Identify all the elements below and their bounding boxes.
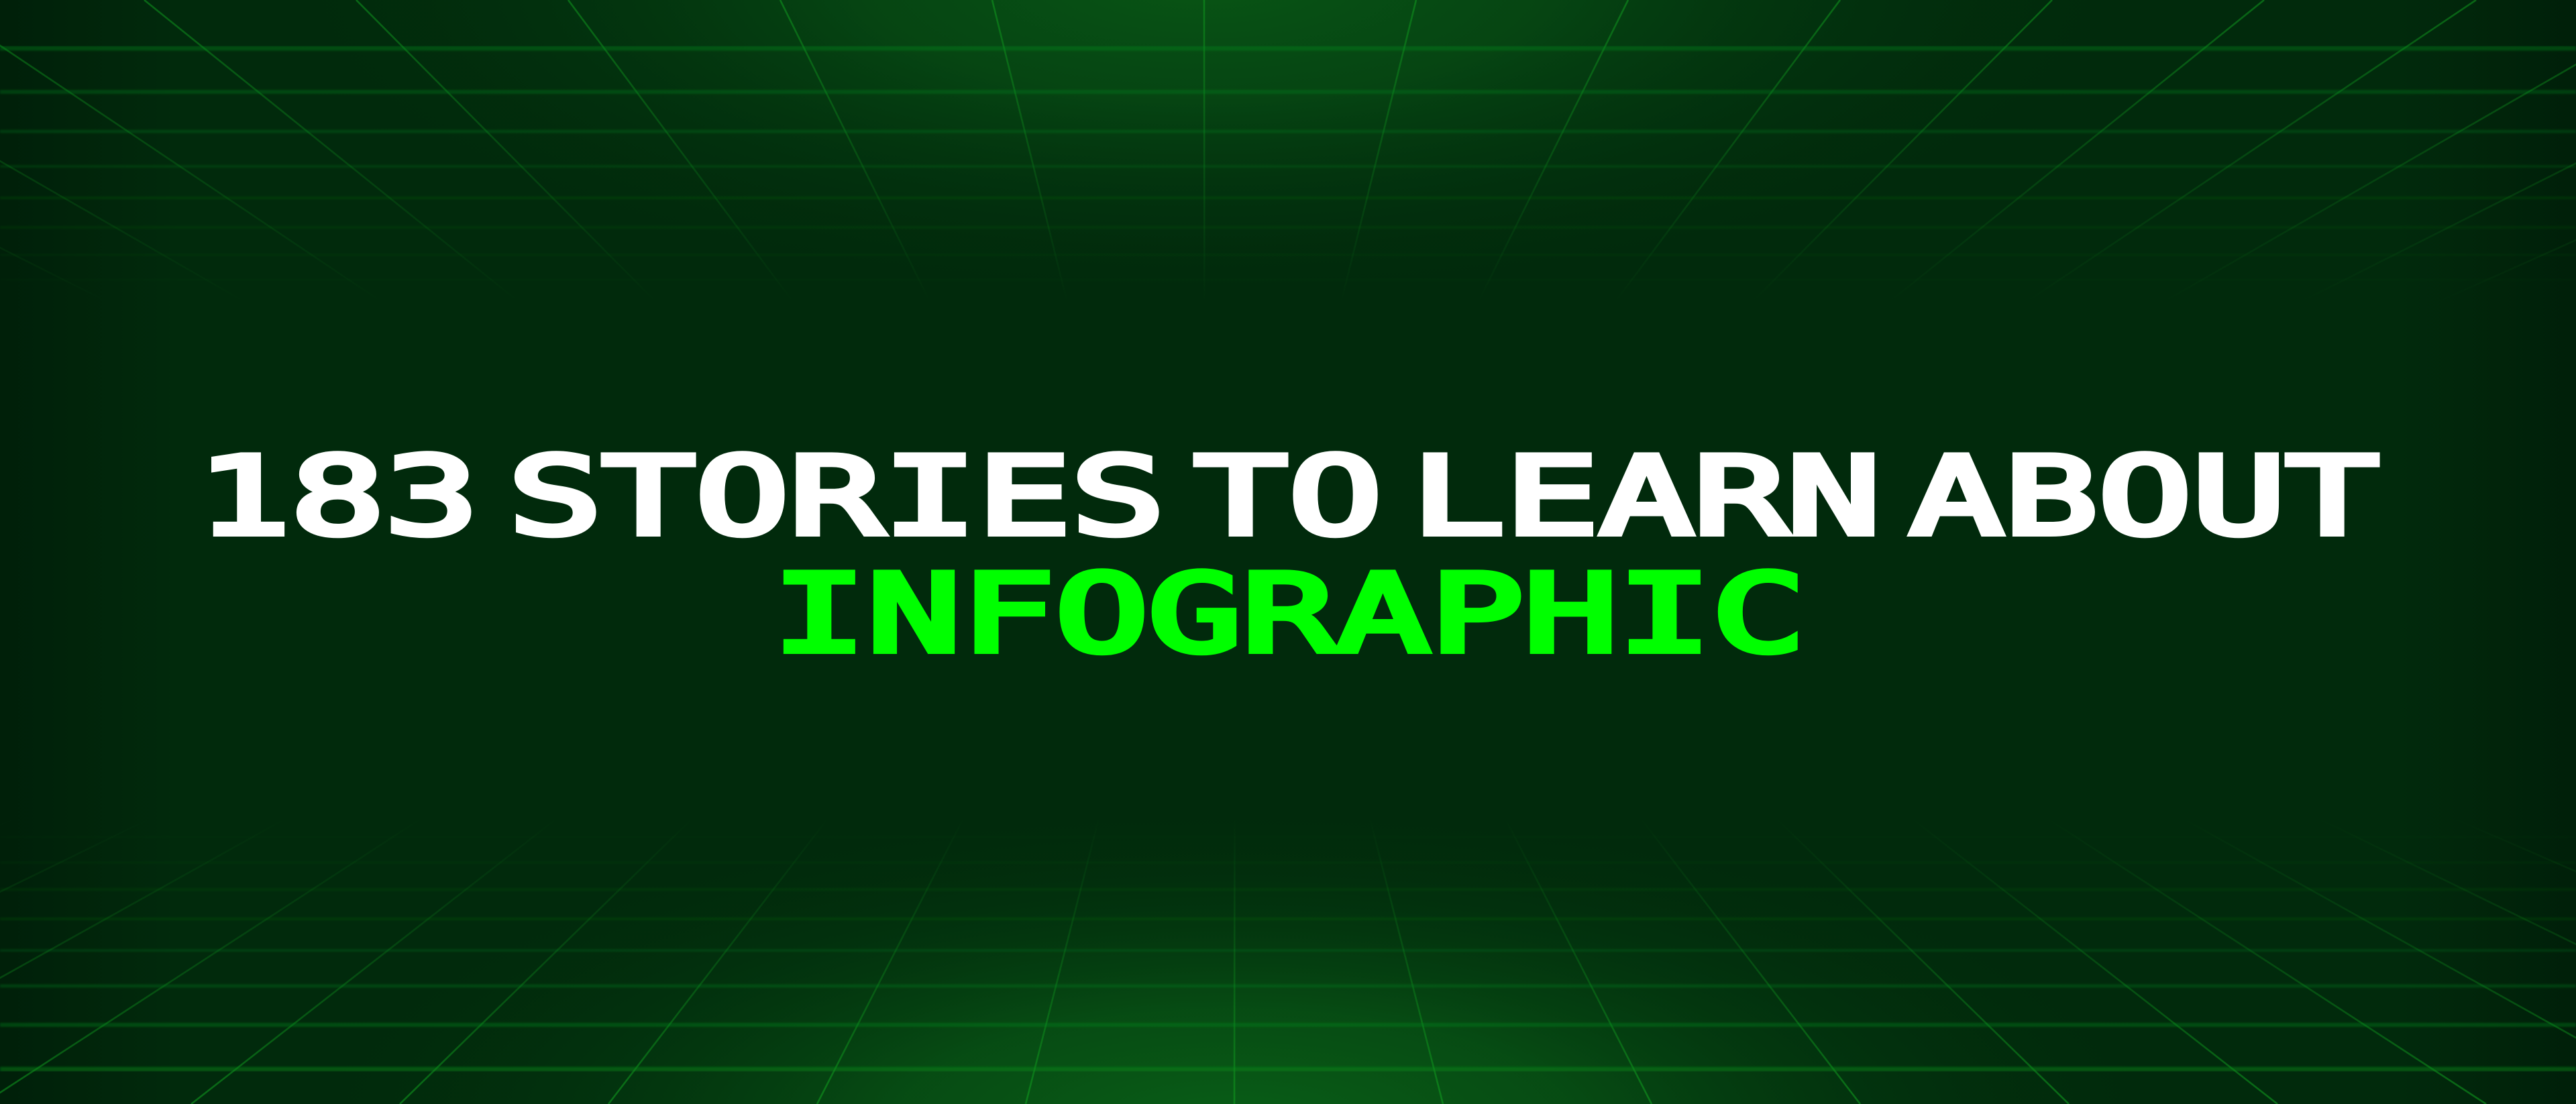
- bottom perspective grid: [0, 771, 2576, 1104]
- title line 1: 183 STORIES TO LEARN ABOUT: [197, 434, 2379, 559]
- title line 2: INFOGRAPHIC: [773, 551, 1805, 676]
- top perspective grid: [0, 0, 2576, 349]
